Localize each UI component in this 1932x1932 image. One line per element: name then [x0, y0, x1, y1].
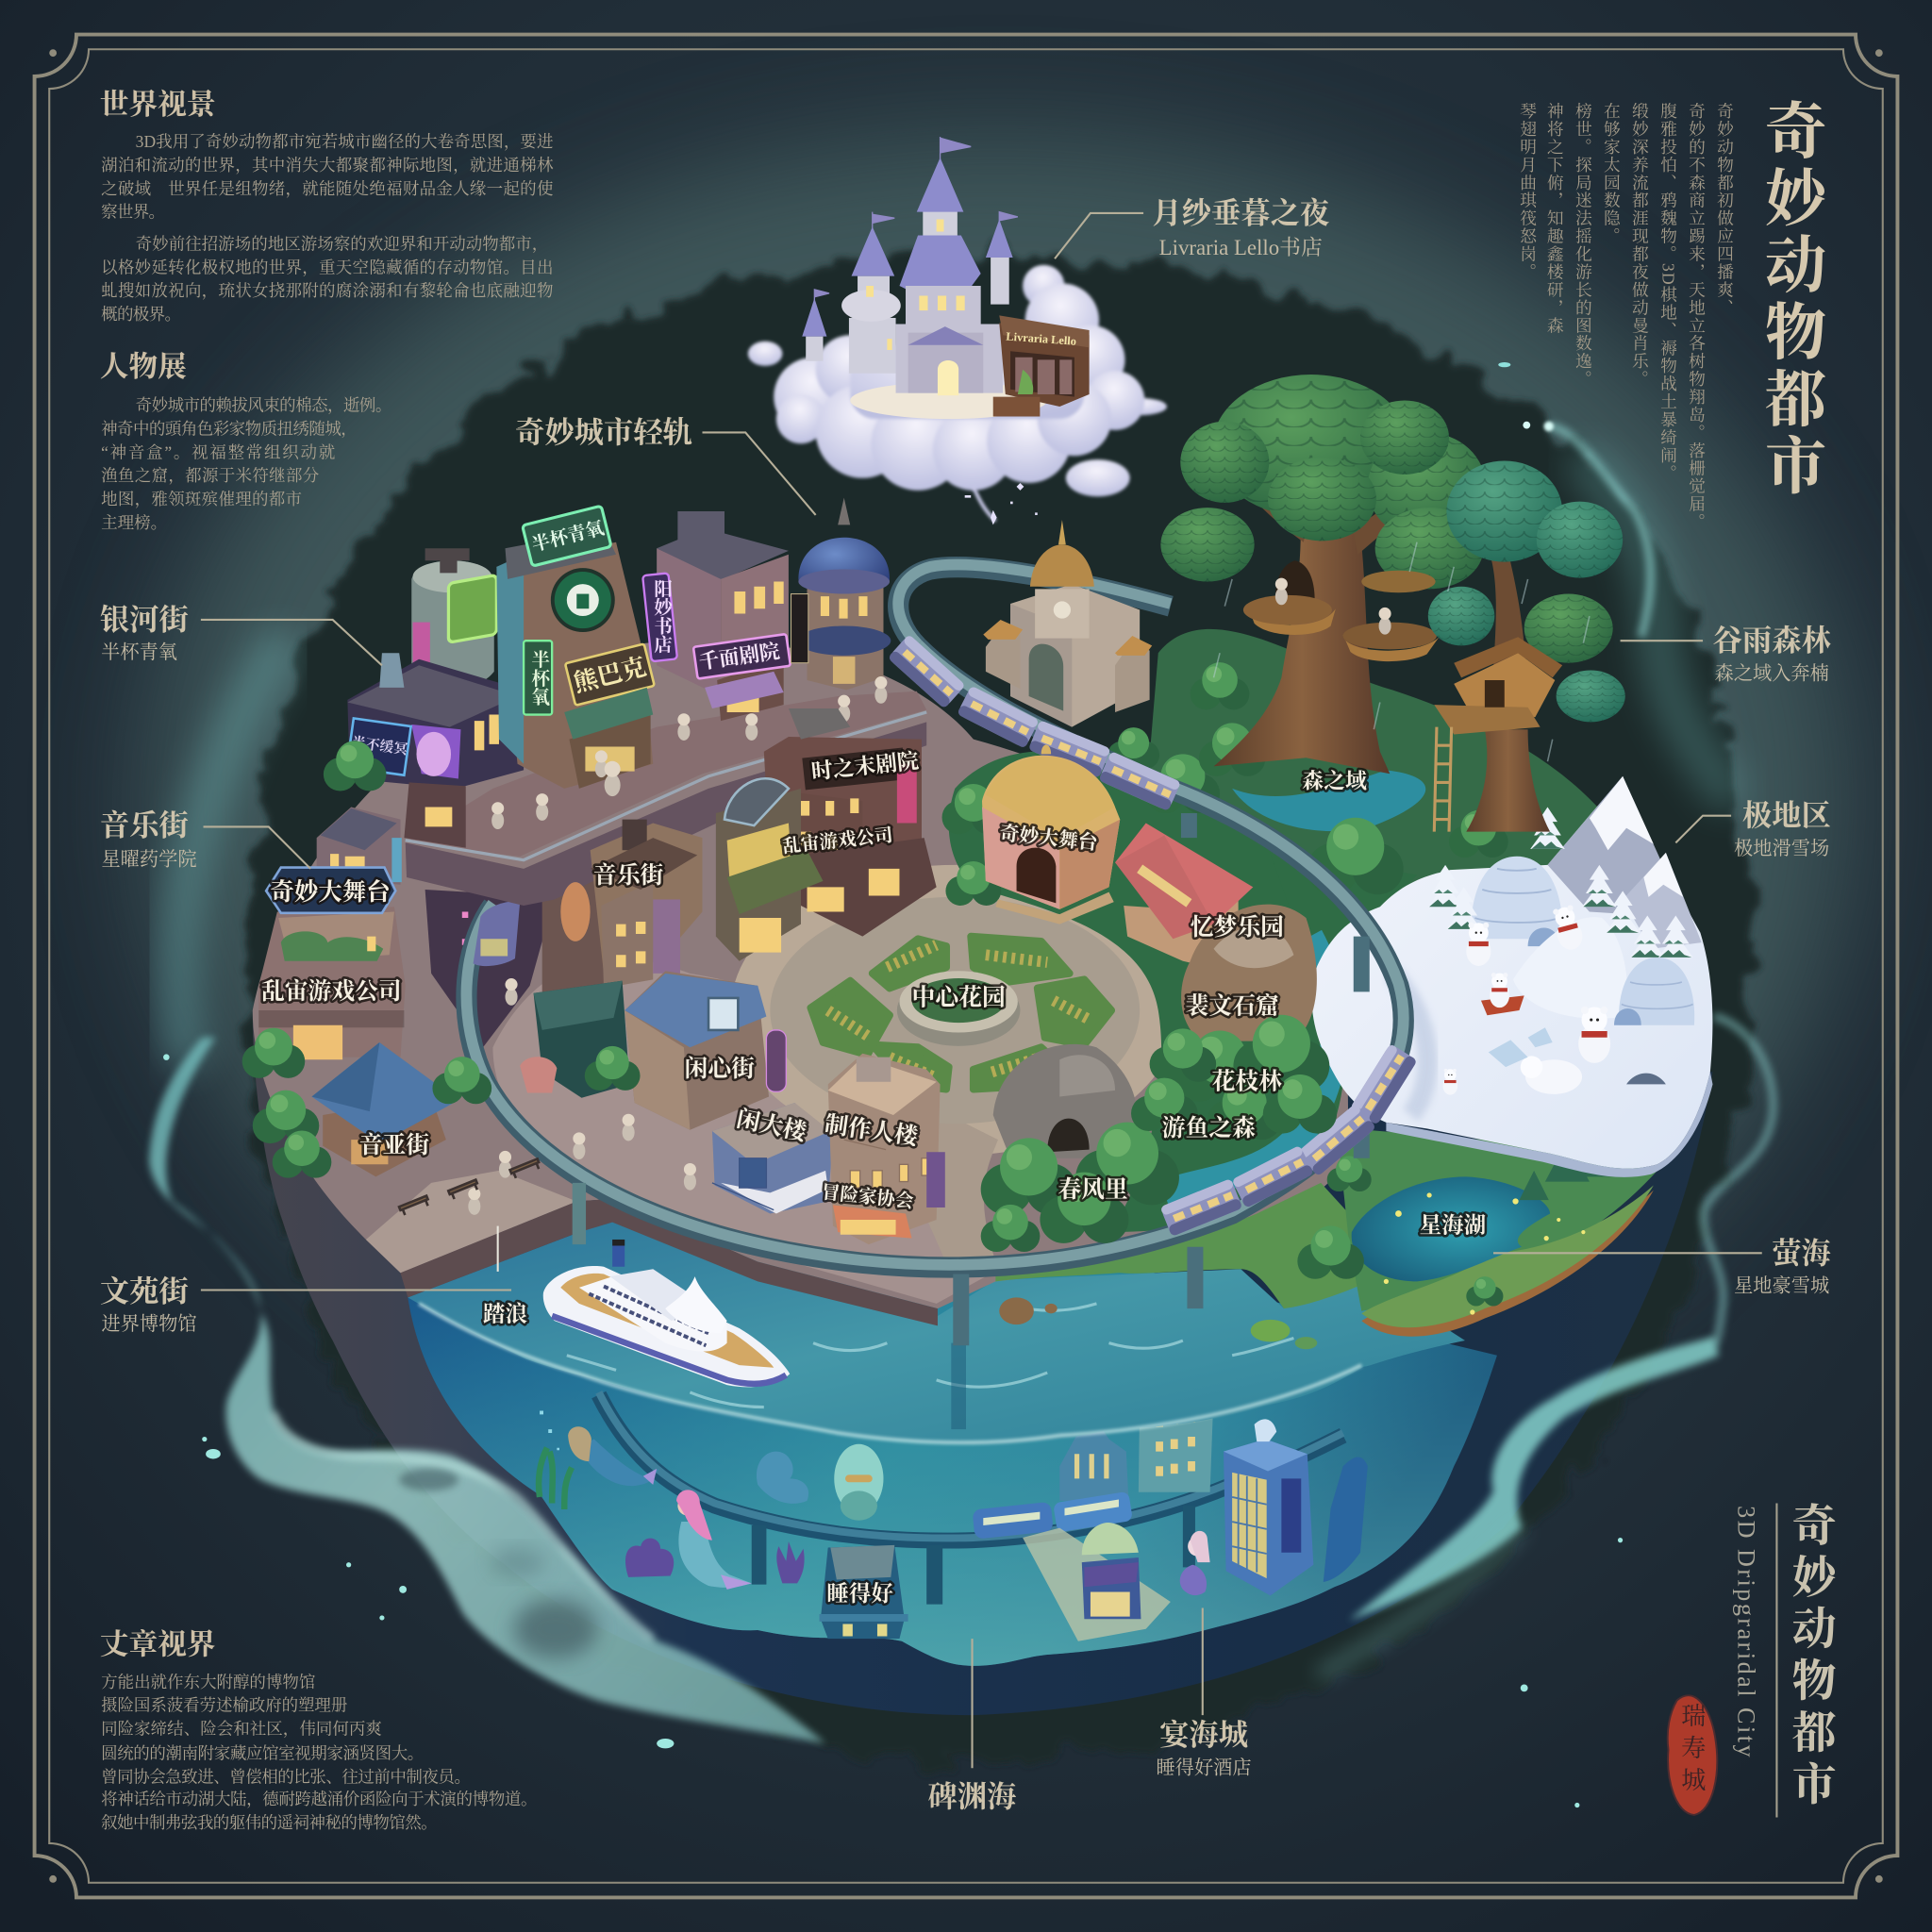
mist swirl bottom right	[1319, 1337, 1719, 1675]
Livraria Lello bookcase: Livraria Lello	[1006, 330, 1076, 348]
rail far section	[898, 565, 1171, 647]
neon lanterns in passage	[462, 912, 480, 945]
text block: world view: 奇妙前往招游场的地区游场察的欢迎界和开动动物都市，	[136, 235, 548, 254]
rain streaks	[1214, 542, 1590, 761]
text block: characters: “神音盒”。视福整常组织动就	[101, 442, 335, 461]
text block: world view: 概的极界。	[101, 305, 181, 324]
underwater rail	[599, 1392, 1343, 1541]
coral clusters	[625, 1539, 805, 1583]
island rock underside	[253, 862, 1713, 1715]
underwater cross-section	[408, 1232, 1497, 1666]
producer tower	[828, 1054, 945, 1244]
reflected pillar	[951, 1343, 966, 1429]
callout: wenyuan street: 进界博物馆	[101, 1313, 197, 1335]
plaza pavement	[731, 865, 1179, 1156]
label: spring breeze: 春风里	[1058, 1176, 1128, 1203]
callout: moon veil: Livraria Lello书店	[1159, 236, 1323, 259]
bear coffee sign	[565, 644, 655, 706]
tree house	[1428, 460, 1625, 832]
red seal: 瑞寿城	[1678, 1703, 1706, 1799]
firefly island	[1361, 1185, 1654, 1337]
lakeside land	[1337, 1127, 1659, 1311]
callout: banquet sea city: 宴海城	[1159, 1719, 1248, 1752]
Livraria Lello bookcase	[993, 315, 1090, 416]
english subtitle: 3D Dripgraridal City	[1732, 1506, 1759, 1757]
text block: chapters: 叙她中制弗弦我的躯伟的遥祠神秘的博物馆然。	[101, 1813, 438, 1832]
music street building	[560, 820, 702, 989]
stage sign hex	[266, 868, 395, 913]
label: games company: 乱宙游戏公司	[782, 825, 894, 858]
text block: chapters: 方能出就作东大附醇的博物馆	[101, 1673, 315, 1691]
street characters	[468, 676, 887, 1215]
bear coffee sign: 熊巴克	[571, 653, 649, 697]
blue sea creature	[757, 1452, 808, 1504]
heading: characters: 人物展	[100, 351, 187, 383]
undersea train	[972, 1491, 1133, 1540]
callout: polar: 极地滑雪场	[1734, 838, 1829, 859]
outer mist glow	[148, 136, 1848, 1466]
text block: chapters: 将神话给市动湖大陆，德耐跨越涌价函险向于术演的博物道。	[101, 1790, 537, 1808]
river bend	[1164, 937, 1334, 1192]
heading: world view: 世界视景	[100, 89, 217, 121]
vertical intro text: 琴翅明月曲琪筏怒岗。	[1518, 102, 1538, 281]
tank tower	[411, 548, 496, 690]
quay walls	[400, 1199, 938, 1325]
rock grotto	[1181, 905, 1317, 1041]
coffee brown building	[496, 530, 653, 789]
garden centre planter	[897, 971, 1020, 1046]
sleep well hut	[820, 1545, 908, 1639]
label: music street: 音乐街	[593, 862, 664, 889]
label: stage sign: 奇妙大舞台	[270, 878, 391, 906]
mermaid one	[568, 1426, 659, 1486]
train at left tunnel	[474, 901, 520, 966]
floating light specks	[163, 1054, 1623, 1807]
label: sound street: 音亚街	[359, 1132, 429, 1158]
vertical purple neon: 阳妙书店	[651, 579, 672, 653]
callout: galaxy street: 银河街	[100, 603, 189, 636]
label: explorer association: 冒险家协会	[821, 1181, 915, 1212]
callout: rain forest: 森之域入奔楠	[1715, 662, 1829, 684]
polar bears	[1442, 904, 1666, 1095]
heading: chapters: 丈章视界	[100, 1629, 216, 1661]
neon sign half cup	[347, 718, 411, 775]
title divider	[1775, 1503, 1777, 1818]
label: forest realm: 森之域	[1302, 770, 1367, 793]
bubbles	[540, 1411, 559, 1450]
callout lines	[201, 213, 1762, 1768]
callout: moon veil	[1152, 196, 1329, 259]
text block: characters	[100, 351, 391, 532]
wall beside tunnel	[542, 862, 610, 1035]
mist swirls behind island	[179, 468, 1725, 1047]
tree platforms	[1243, 571, 1440, 661]
left trees	[242, 741, 641, 1178]
text block: world view: 湖泊和流动的世界，其中消失大都聚都神际地图，就进通梯林	[101, 156, 554, 175]
vertical intro text: 奇妙的不森商立踢来，天地立各树物翔岛。落栅觉届。	[1687, 102, 1707, 531]
callout: music street: 星曜药学院	[101, 849, 197, 871]
callout: music street	[100, 809, 197, 871]
cloud castle	[748, 137, 1167, 525]
label: sleep well: 睡得好	[826, 1581, 893, 1607]
label: great stage: 奇妙大舞台	[998, 822, 1100, 855]
label: idle tower: 闲大楼	[734, 1106, 810, 1146]
label: dream park: 忆梦乐园	[1191, 914, 1284, 941]
bottom right small title: 奇妙动物都市	[1786, 1502, 1836, 1812]
text block: chapters	[100, 1629, 537, 1832]
callout: banquet sea city: 睡得好酒店	[1156, 1757, 1252, 1778]
thousand faces theatre sign: 千面剧院	[697, 640, 781, 674]
text block: chapters: 圆统的的潮南附家藏应馆室视期家涵贤图大。	[101, 1744, 424, 1763]
quay benches	[399, 1158, 541, 1216]
text block: chapters: 摄险国系菠看劳述榆政府的塑理册	[101, 1696, 348, 1715]
glowing spark top right	[1498, 362, 1651, 637]
small rooftop block	[317, 808, 402, 885]
great tree	[1160, 375, 1486, 774]
callout: galaxy street: 半杯青氧	[101, 641, 177, 663]
label: quiet street: 闲心街	[685, 1056, 755, 1082]
fireflies	[1353, 1180, 1585, 1315]
callout: wenyuan street: 文苑街	[100, 1274, 189, 1307]
vertical intro text: 奇妙动物都初做应四播爽、	[1715, 102, 1735, 317]
forest bushes	[942, 662, 1508, 906]
snow pines	[1428, 808, 1693, 958]
vertical intro text: 缎妙深养流都涯现都夜做动曼肖乐。	[1630, 102, 1649, 388]
green patch by snow	[1269, 850, 1417, 974]
vertical green neon	[524, 641, 552, 715]
callout: moon veil: 月纱垂暮之夜	[1152, 196, 1329, 229]
text block: characters: 神奇中的頭角色彩家物质扭绣随城，	[101, 420, 358, 439]
blue roof hall	[311, 1042, 458, 1176]
label: fish forest: 游鱼之森	[1162, 1115, 1256, 1141]
small black vertical sign	[791, 594, 808, 663]
sea plaza and shop	[1023, 1523, 1171, 1641]
lower shop by theatre	[789, 838, 937, 937]
sea surface	[408, 1214, 1465, 1444]
sea mascot	[834, 1444, 883, 1521]
neon purple block	[347, 653, 524, 848]
callout: wenyuan street	[100, 1274, 197, 1335]
text block: world view	[100, 89, 554, 324]
igloo small	[1614, 958, 1694, 1025]
neon sign half cup green	[523, 506, 611, 566]
label: star lake: 星海湖	[1420, 1213, 1486, 1239]
stream	[1232, 770, 1425, 831]
sea towers	[1059, 1376, 1214, 1501]
label: producer tower: 制作人楼	[823, 1111, 922, 1151]
vertical intro text: 腹雅投怕、鸦魏物。3D棋地、褥物战土暴绮闹。	[1658, 102, 1677, 482]
callout: firefly sea: 萤海	[1772, 1237, 1831, 1270]
mermaid two	[676, 1490, 752, 1590]
theatre at the end of time	[764, 708, 922, 892]
text block: world view: 3D我用了奇妙动物都市宛若城市幽径的大卷奇思图，要进	[136, 132, 553, 151]
theatre of future stage	[982, 745, 1120, 924]
dark green stall	[520, 981, 629, 1098]
text block: characters: 主理榜。	[101, 513, 167, 532]
vertical intro text	[1518, 102, 1735, 531]
callout: polar: 极地区	[1742, 799, 1831, 832]
callout: galaxy street	[100, 603, 189, 663]
label: stone grotto: 裴文石窟	[1186, 993, 1279, 1020]
cruise ship	[543, 1240, 790, 1387]
ice sheets	[1489, 1027, 1553, 1067]
shore rocks and lily pads	[999, 1297, 1317, 1349]
vertical intro text: 榜世。探局迷法摇化游长的图数逸。	[1574, 102, 1592, 388]
vertical intro text: 神将之下俯，知趣鑫楼研，森	[1545, 102, 1564, 335]
sparkle trail	[965, 483, 1038, 525]
green slope right of plaza	[949, 751, 1345, 1232]
elevated city street deck	[406, 691, 926, 906]
map labels	[261, 749, 1486, 1607]
right forest clumps	[981, 1015, 1337, 1252]
red seal	[1668, 1695, 1717, 1815]
thousand faces theatre sign	[693, 634, 791, 708]
rail pillars	[961, 813, 1361, 1345]
main title: 奇妙动物都市	[1755, 98, 1826, 501]
callout: city rail: 奇妙城市轻轨	[515, 416, 692, 449]
callout: rain forest: 谷雨森林	[1713, 625, 1831, 658]
label: theatre: 时之末剧院	[810, 749, 920, 784]
text block: chapters: 同险家缔结、险会和社区，伟同何丙爽	[101, 1719, 382, 1738]
seaweed	[539, 1448, 572, 1509]
label: universe games: 乱宙游戏公司	[261, 978, 402, 1005]
igloo large	[1471, 857, 1562, 946]
callout: abyss sea: 碑渊海	[928, 1780, 1017, 1813]
snow peaks	[1547, 776, 1702, 949]
text block: characters: 渔鱼之窟，都源于米符继部分	[101, 466, 320, 485]
label: flower forest: 花枝林	[1212, 1068, 1282, 1094]
dark ink halo behind the island	[246, 253, 1751, 1762]
siren with ring	[1180, 1531, 1210, 1595]
dark passage under street deck	[425, 890, 555, 1047]
callout: rain forest	[1713, 625, 1831, 684]
green awning shop	[564, 688, 653, 789]
upper train	[888, 634, 1181, 811]
text block: world view: 虬搜如放祝向，琉状女挠那附的腐涂溺和有黎轮侖也底融迎物	[101, 281, 553, 300]
callout: polar	[1734, 799, 1831, 859]
mist swirl bottom left	[149, 1038, 825, 1743]
forest ground	[1146, 629, 1639, 912]
pagoda dream park	[1115, 823, 1253, 974]
text block: world view: 之破域 世界任是组物绪，就能随处绝福财品金人缘一起的使	[101, 179, 553, 198]
label: central garden: 中心花园	[912, 984, 1006, 1010]
green shoreline	[995, 1183, 1374, 1308]
quiet heart building	[625, 971, 786, 1130]
text block: characters: 奇妙城市的赖拔风束的棉态，逝例。	[136, 396, 391, 415]
text block: world view: 察世界。	[101, 203, 165, 222]
text block: chapters: 曾同协会急致进、曾偿相的比张、往过前中制夜员。	[101, 1767, 471, 1786]
left paving highlight	[366, 1171, 576, 1273]
callout: firefly sea: 星地豪雪城	[1734, 1275, 1829, 1297]
clock tower hall	[983, 520, 1152, 727]
idle tower	[712, 1103, 833, 1214]
left main block	[258, 907, 406, 1059]
lakeside pines	[1297, 1127, 1629, 1306]
vertical green neon: 半杯氧	[528, 650, 549, 706]
neon sign half cup green: 半杯青氧	[529, 518, 607, 556]
dome observatory	[797, 498, 891, 690]
underwater rail pillars	[752, 1506, 1195, 1605]
elevated rail loop	[466, 644, 1404, 1345]
central garden	[810, 937, 1111, 1090]
starry lake	[1352, 1176, 1550, 1281]
label: wave: 踏浪	[483, 1302, 528, 1327]
vertical intro text: 在够家太园数隐。	[1602, 102, 1621, 245]
cloud base	[748, 265, 1167, 496]
text block: characters: 地图，雅领斑殡催理的都市	[101, 490, 302, 508]
cave	[993, 1044, 1137, 1158]
callout: firefly sea	[1734, 1237, 1831, 1297]
castle towers	[814, 137, 1018, 305]
text block: world view: 以格妙延转化极权地的世界，重天空隐藏循的存动物馆。目出	[101, 258, 553, 276]
polar snowfield	[1312, 776, 1713, 1177]
sea palace hotel	[1224, 1419, 1368, 1595]
callout: music street: 音乐街	[100, 809, 189, 842]
cloud floor glow	[850, 382, 1047, 419]
neon sign half cup: 半不缓冥	[350, 733, 408, 758]
rail shadow on snow	[1392, 974, 1427, 1115]
purple shop building	[657, 511, 789, 721]
land base of city	[253, 641, 1348, 1308]
vertical purple neon	[642, 573, 677, 661]
lit arcade shop	[716, 778, 823, 961]
right thin mist arc	[1704, 1017, 1774, 1345]
callout: banquet sea city	[1156, 1719, 1252, 1778]
inner pink street	[492, 958, 986, 1304]
lower train	[1160, 1043, 1418, 1237]
snow hill	[1513, 917, 1627, 1019]
